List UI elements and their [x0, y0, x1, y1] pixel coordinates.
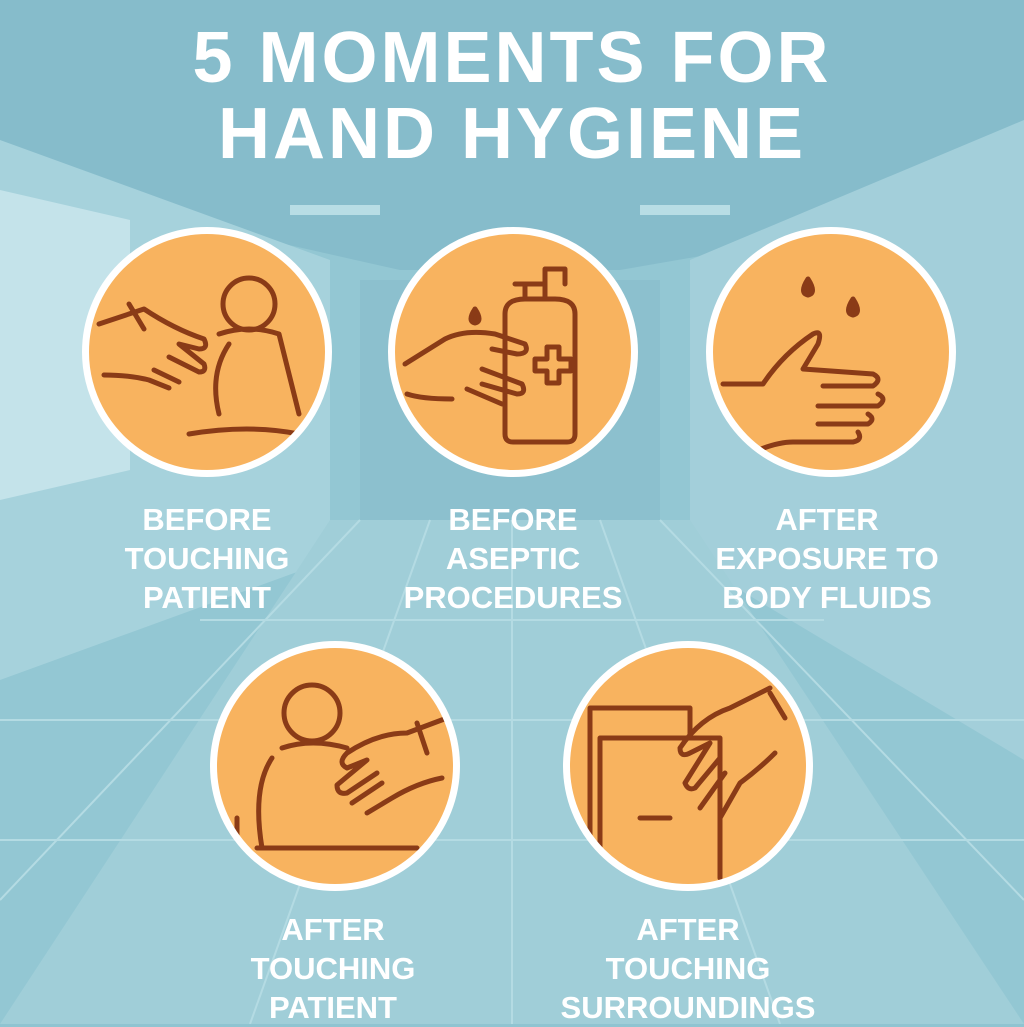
label 3: AFTER — [775, 502, 879, 537]
label 5 — [561, 912, 815, 1025]
circle 2: before aseptic — [388, 227, 638, 477]
label 3: EXPOSURE TO — [715, 541, 939, 576]
circle 5: after touching surroundings — [563, 641, 813, 891]
title — [192, 18, 832, 174]
label 5: SURROUNDINGS — [561, 990, 815, 1025]
label 4 — [251, 912, 415, 1025]
label 3 — [715, 502, 939, 615]
label 5: TOUCHING — [606, 951, 770, 986]
circle 4: after touching patient — [210, 641, 460, 891]
label 4: PATIENT — [269, 990, 397, 1025]
label 1: PATIENT — [143, 580, 271, 615]
label 1: TOUCHING — [125, 541, 289, 576]
label 3: BODY FLUIDS — [722, 580, 932, 615]
title: 5 MOMENTS FOR — [192, 18, 832, 98]
circle 3: after body fluids — [706, 227, 956, 477]
label 4: AFTER — [281, 912, 385, 947]
label 1 — [125, 502, 289, 615]
label 2: ASEPTIC — [446, 541, 580, 576]
circle 1: before touching patient — [82, 227, 332, 477]
title: HAND HYGIENE — [218, 94, 806, 174]
label 2 — [404, 502, 622, 615]
label 2: BEFORE — [448, 502, 578, 537]
label 1: BEFORE — [142, 502, 272, 537]
label 5: AFTER — [636, 912, 740, 947]
label 4: TOUCHING — [251, 951, 415, 986]
label 2: PROCEDURES — [404, 580, 622, 615]
